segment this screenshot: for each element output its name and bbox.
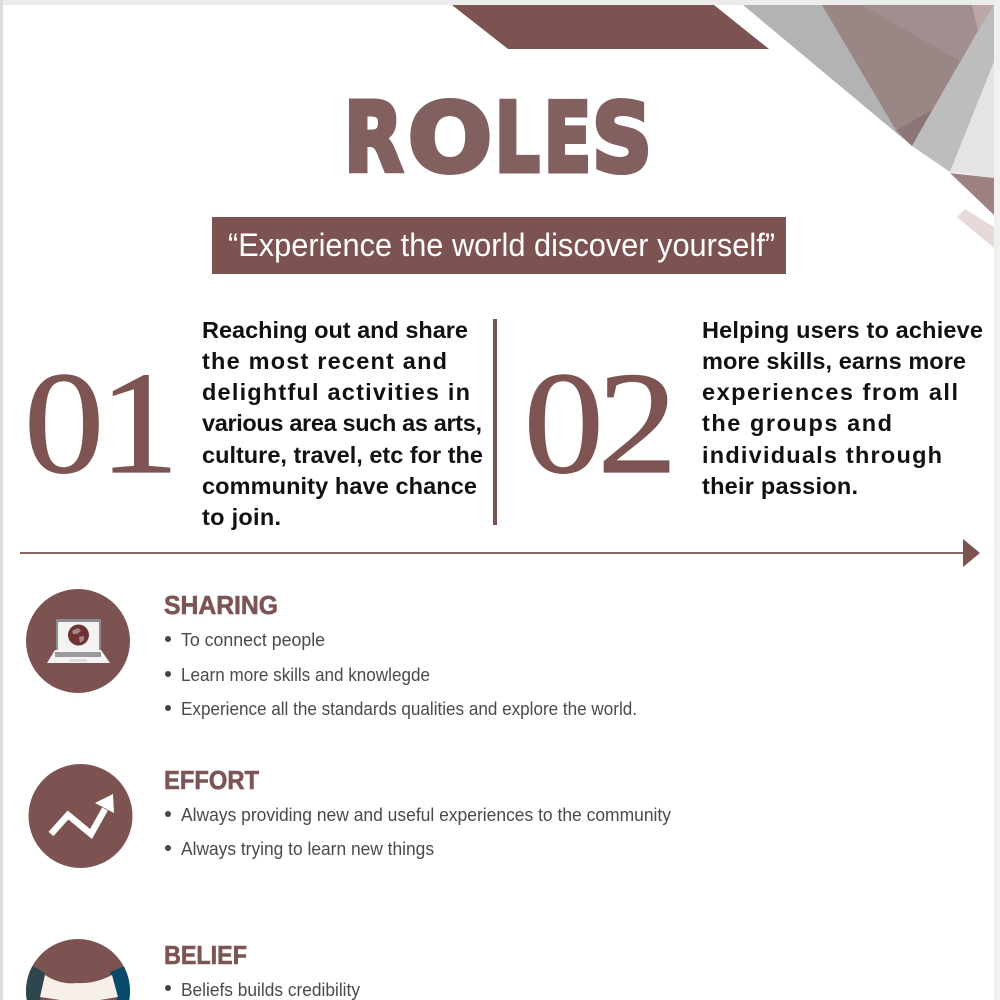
section: sharing: Experience all the standards qualities and explore the world. (181, 698, 637, 719)
top banner shape (452, 5, 769, 49)
section: belief (164, 940, 361, 1000)
title: R (344, 84, 403, 194)
title: E (544, 84, 591, 194)
role 02 text (702, 317, 983, 499)
role 02 number: 02 (524, 343, 678, 504)
role 01 text: the most recent and (202, 348, 447, 374)
tagline banner: “Experience the world discover yourself” (228, 227, 775, 263)
role 02 text: experiences from all (702, 379, 958, 405)
role 01 text: culture, travel, etc for the (202, 442, 483, 468)
role 01 text: delightful activities in (202, 379, 470, 405)
section: effort (164, 765, 672, 859)
icon: rising arrow (28, 764, 132, 868)
section: sharing (164, 590, 637, 719)
role 02 text: their passion. (702, 473, 858, 499)
title: L (495, 84, 540, 194)
tagline banner (212, 217, 786, 274)
icon: handshake (20, 939, 135, 1000)
role 01 text: Reaching out and share (202, 317, 468, 343)
role 01 text: various area such as arts, (202, 410, 482, 436)
section: effort: Always trying to learn new things (181, 838, 434, 859)
section: belief: BELIEF (164, 940, 247, 970)
role 01 text: community have chance (202, 473, 477, 499)
corner polygon decoration (743, 5, 994, 248)
section: effort: Always providing new and useful experiences to the community (181, 804, 672, 825)
role 01 text: to join. (202, 504, 281, 530)
arrow (20, 539, 980, 567)
role 02 text: the groups and (702, 410, 892, 436)
icon: laptop and globe (26, 589, 130, 693)
title: O (408, 84, 492, 194)
vertical divider (493, 319, 497, 525)
role 02 text: Helping users to achieve (702, 317, 983, 343)
section: sharing: To connect people (181, 629, 325, 650)
section: effort: EFFORT (164, 765, 259, 795)
section: sharing: Learn more skills and knowlegde (181, 664, 430, 685)
role 01 text (202, 317, 483, 530)
title: S (592, 84, 652, 194)
role 02 text: more skills, earns more (702, 348, 966, 374)
role 01 number: 01 (24, 343, 179, 504)
section: belief: Beliefs builds credibility (181, 979, 361, 1000)
role 02 text: individuals through (702, 442, 942, 468)
section: sharing: SHARING (164, 590, 278, 620)
